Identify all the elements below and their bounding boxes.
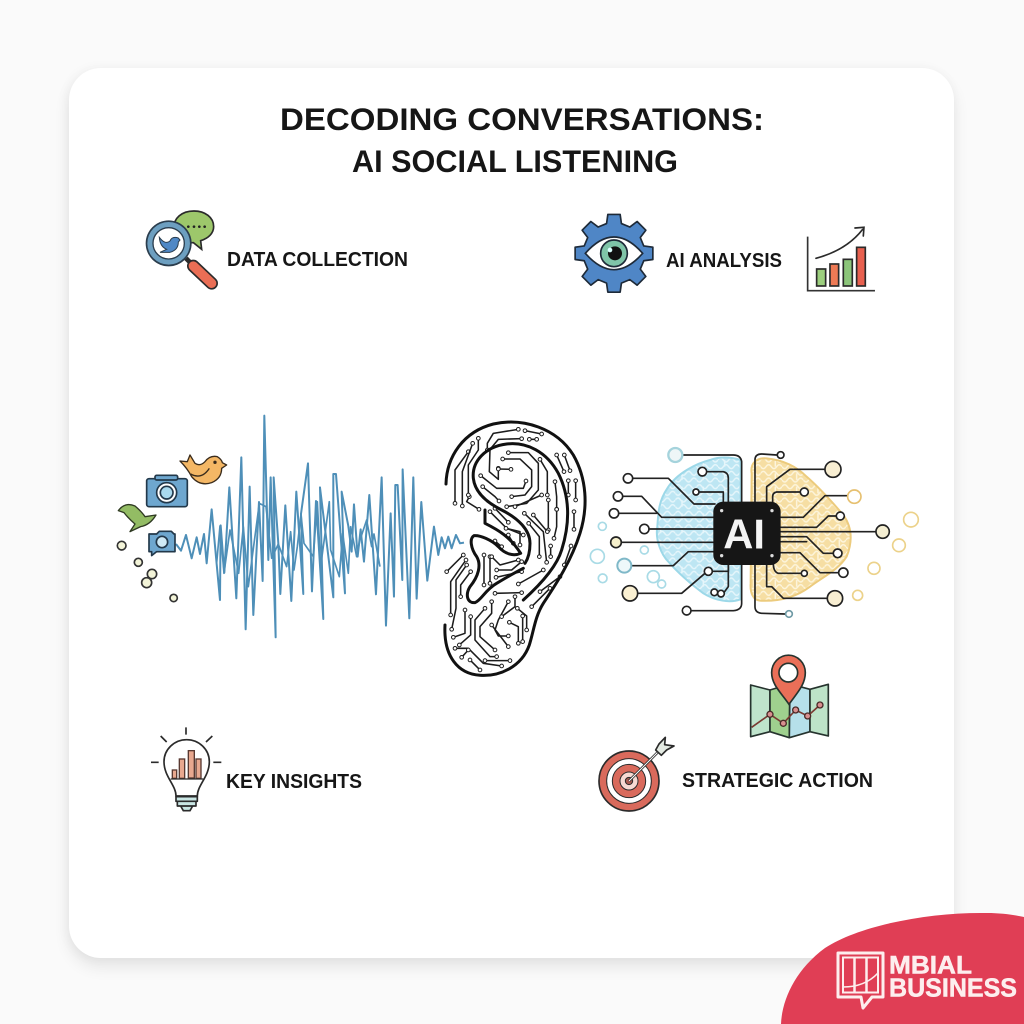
icon: small camera bubble [149,531,175,556]
icon: target with arrow [599,737,674,811]
label: key insights: KEY INSIGHTS [226,771,362,793]
title: AI SOCIAL LISTENING [352,143,678,179]
icon: magnifier with bird and speech bubble [146,211,214,283]
icon: large camera [147,475,187,507]
AI chip: AI [723,511,765,557]
helix inner line [473,444,568,600]
logo icon [838,953,883,1008]
ear outline [445,422,585,675]
title [280,101,764,179]
logo text: MBIAL [889,952,972,980]
title: DECODING CONVERSATIONS: [280,101,764,137]
icon: map with pin [751,655,828,738]
icon: gear with eye [575,214,653,292]
red badge shape [781,913,1024,1024]
panel: white card [69,68,954,958]
waveform [176,416,464,637]
icons: social media cluster [117,455,227,602]
logo text [889,952,1017,1002]
decorative dots [117,541,177,602]
brain left lobe [657,457,741,601]
icon: growth bar chart [808,227,875,291]
icon: light bulb with bars [151,727,221,811]
icon: orange bird [180,455,227,484]
label: strategic action: STRATEGIC ACTION [682,770,873,792]
floating blue circles [590,522,666,588]
brain right lobe [751,458,851,601]
circuit traces [447,429,576,670]
inner ear fold [467,510,523,603]
logo text: BUSINESS [889,972,1017,1002]
AI brain diagram [590,448,918,617]
logo badge [781,913,1024,1024]
icon: green bird [118,505,156,532]
label: ai analysis: AI ANALYSIS [666,250,782,272]
circuit end nodes [609,448,889,617]
circuit lines [618,454,876,614]
floating yellow circles [853,512,918,600]
label: data collection: DATA COLLECTION [227,249,408,271]
AI chip [713,502,781,565]
ear with circuit traces [445,422,585,675]
